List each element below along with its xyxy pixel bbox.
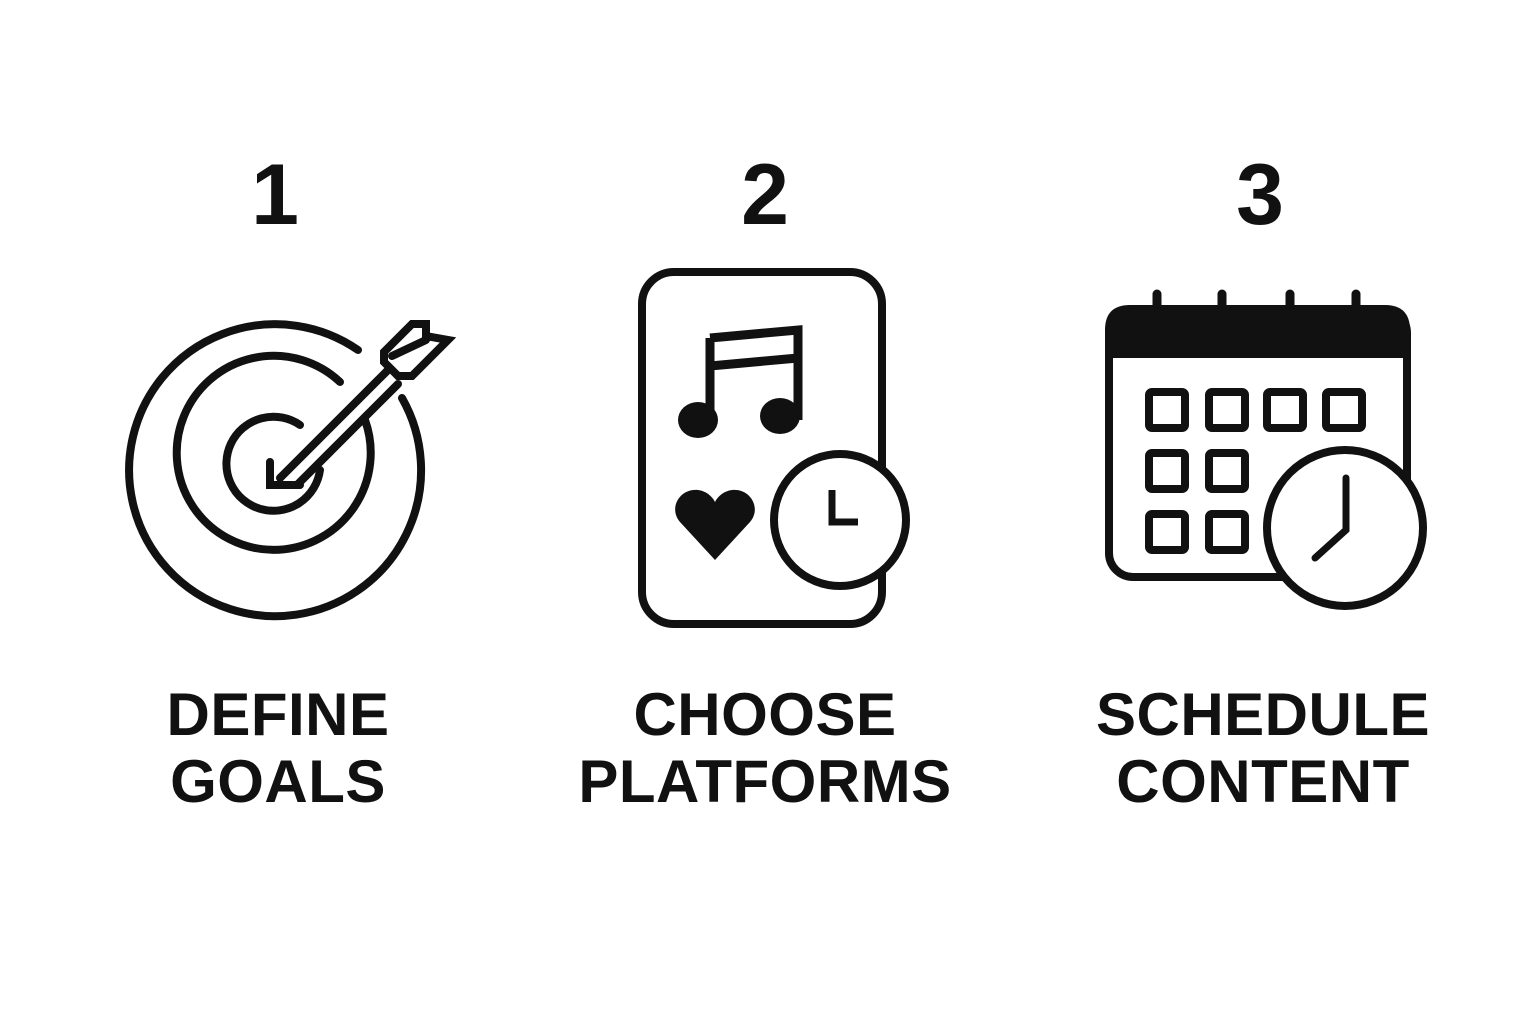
label: schedule content: SCHEDULE (1096, 681, 1430, 748)
step 3: schedule content (1096, 147, 1430, 815)
number 3: 3 (1236, 147, 1284, 243)
step 2: choose platforms (578, 147, 952, 815)
number 1: 1 (251, 147, 299, 243)
step 1: define goals (129, 147, 448, 815)
step 1: define goals: GOALS (170, 748, 386, 815)
icon: target with arrow (129, 324, 448, 616)
number 2: 2 (741, 147, 789, 243)
label: define goals: DEFINE (166, 681, 390, 748)
label: choose platforms: CHOOSE (633, 681, 897, 748)
icon: device with music, heart and clock (642, 272, 906, 624)
step 3: schedule content: CONTENT (1116, 748, 1410, 815)
icon: calendar with clock (1105, 294, 1423, 606)
step 2: choose platforms: PLATFORMS (578, 748, 952, 815)
